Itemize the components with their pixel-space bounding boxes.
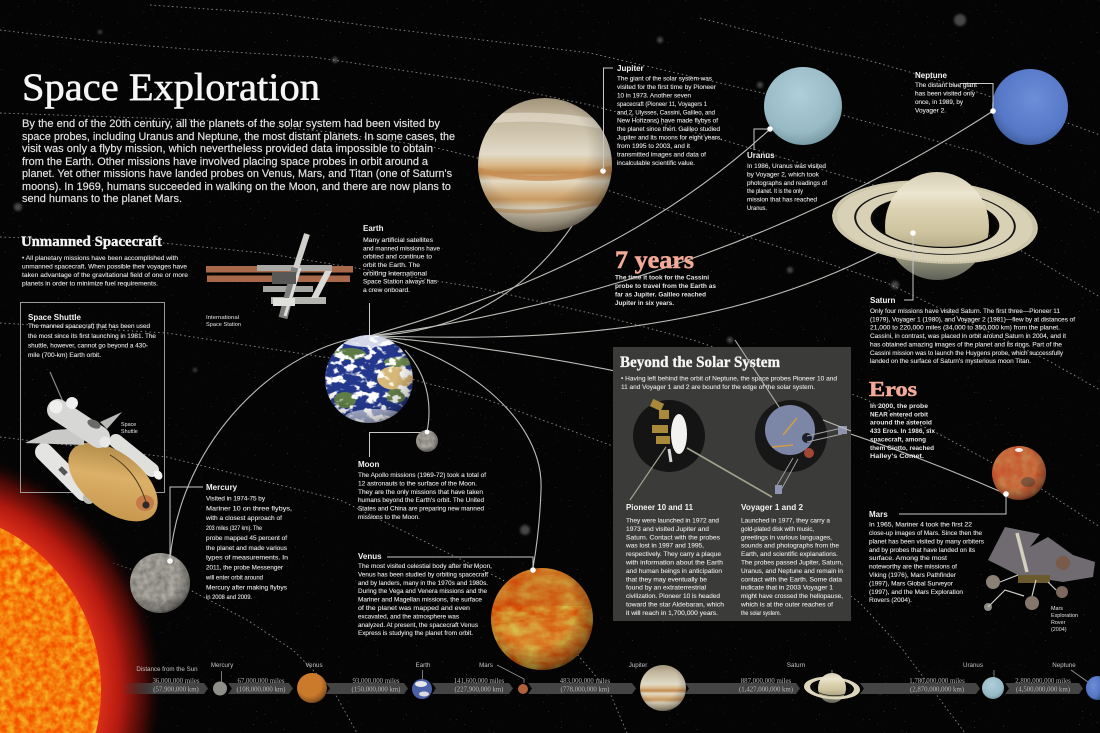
text: mercury: with a closest approach of (205, 515, 282, 522)
column: pioneer 10 and 11: was lost in 1997 and 1995, (625, 543, 704, 550)
text: neptune: has been visited only (915, 90, 976, 98)
text: mars: Mars (869, 510, 888, 519)
column: pioneer 10 and 11: found by an extraterrestrial (626, 585, 707, 592)
planet: neptune (960, 69, 1068, 145)
intro paragraph: moons). In 1969, humans succeeded in walking on the Moon, and there are now plans to (22, 181, 451, 193)
intro (621, 376, 837, 391)
column: pioneer 10 and 11: with information about the Earth (625, 560, 723, 566)
distances: 67,000,000 miles (237, 678, 285, 685)
distances: 141,600,000 miles (454, 678, 505, 685)
column: pioneer 10 and 11: and human beings in anticipation (626, 568, 722, 575)
text: uranus: In 1986, Uranus was visited (747, 163, 826, 170)
text: mars: and by probes that have landed on its (869, 547, 976, 554)
text: mercury: Mercury after making flybys (206, 584, 288, 591)
intro paragraph: planet. Yet other missions have landed probes on Venus, Mars, and Titan (one of Saturn's (22, 168, 452, 180)
description: planets in order to minimize fuel requirements. (22, 280, 158, 288)
text: uranus: Uranus. (747, 205, 767, 212)
scale: neptune (1052, 662, 1100, 700)
description: the most since its first launching in 1981. The (28, 333, 156, 340)
column: voyager 1 and 2: Voyager 1 and 2 (741, 502, 803, 512)
intro paragraph: send humans to the planet Mars. (22, 193, 182, 205)
column: pioneer 10 and 11: 1973 and visited Jupiter and (626, 526, 709, 533)
callout: eros: 433 Eros. In 1986, six (870, 428, 935, 435)
description (22, 255, 188, 288)
text: saturn: Saturn (870, 296, 895, 305)
text: venus: and by landers, many in the 1970s and 1980s. (358, 580, 488, 587)
text: saturn: (1979), Voyager 1 (1980), and Voyager 2 (1981)—flew by at distances of (870, 316, 1075, 323)
text: jupiter: visited for the first time by Pioneer (617, 84, 717, 91)
text: jupiter: 10 in 1973. Another seven (617, 92, 691, 99)
intro paragraph: By the end of the 20th century, all the planets of the solar system had been visited by (22, 118, 440, 130)
column: voyager 1 and 2: which is at the outer reaches of (740, 602, 833, 608)
text: jupiter: spacecraft (Pioneer 11, Voyagers 1 (617, 101, 707, 108)
column: pioneer 10 and 11: civilization. Pioneer 10 is headed (626, 593, 720, 600)
heading: distance from the sun: Distance from the Sun (136, 666, 198, 673)
description (28, 323, 156, 359)
panel: space shuttle (20, 302, 172, 537)
text: moon: 12 astronauts to the surface of the Moon. (358, 480, 477, 487)
text: neptune (915, 71, 977, 114)
callout: eros: spacecraft, among (870, 436, 926, 443)
text: mars: Viking (1976), Mars Pathfinder (869, 572, 957, 579)
text: mercury: will enter orbit around (205, 574, 263, 581)
label: space shuttle: Space (121, 422, 136, 428)
callout: eros: Eros (869, 377, 917, 401)
text: saturn: has obtained amazing images of the planet and its rings. Part of the (870, 341, 1062, 348)
column: pioneer 10 and 11 (625, 502, 724, 617)
planet: uranus (754, 67, 842, 150)
callout: 7 years: The time it took for the Cassini (615, 274, 709, 282)
text: venus: During the Vega and Venera missions and the (358, 588, 487, 595)
text: mercury (205, 483, 292, 601)
planet: mercury with leader (130, 487, 203, 613)
planet: mars (899, 446, 1046, 514)
description: shuttle, however, cannot go beyond a 430- (28, 342, 148, 350)
text: venus: The most visited celestial body after the Moon, (358, 563, 492, 570)
text: jupiter: Jupiter and its moons for eight years, (617, 135, 722, 142)
text: neptune: Voyager 2. (915, 108, 946, 114)
space station (206, 234, 353, 328)
text: venus (358, 552, 533, 637)
text: mercury: the planet and made various (206, 545, 288, 552)
label: space shuttle (121, 422, 138, 435)
column: voyager 1 and 2: indicate that in 2003 Voyager 1 (741, 585, 833, 592)
text: saturn: 21,000 to 220,000 miles (34,000 to 350,000 km) from the planet. (870, 325, 1060, 332)
callout: eros: NEAR entered orbit (870, 411, 929, 418)
text: saturn: landed on the surface of Saturn's mysterious moon Titan. (870, 358, 1031, 365)
text: saturn: Cassini mission was to launch the Huygens probe, which successfully (870, 350, 1064, 357)
text: uranus: the planet. It is the only (747, 188, 804, 195)
sun with red glow (0, 440, 170, 733)
distances: (150,000,000 km) (352, 686, 400, 694)
distances: 483,000,000 miles (560, 678, 611, 685)
distance band segments (121, 683, 1083, 694)
text: jupiter: the planet since then. Galileo studied (617, 126, 720, 133)
text: venus: Venus has been studied by orbiting spacecraft (358, 571, 488, 578)
text: jupiter (604, 64, 722, 170)
planet: moon with leader (370, 430, 438, 457)
scale: earth: Earth (416, 662, 431, 669)
text: uranus: photographs and readings of (747, 180, 827, 187)
callout: 7 years: Jupiter in six years. (615, 300, 674, 307)
text: mercury: 203 miles (327 km). The (206, 525, 262, 532)
label: mars exploration rover: Rover (1051, 620, 1066, 626)
column: voyager 1 and 2: contact with the Earth. Some data (741, 576, 842, 583)
title: Space Exploration (22, 66, 320, 109)
label: mars exploration rover: Mars (1051, 606, 1063, 612)
text: uranus: by Voyager 2, which took (747, 171, 820, 178)
text: mercury: 2011, the probe Messenger (206, 565, 284, 572)
text: jupiter: New Horizons) have made flybys of (617, 118, 718, 125)
callout: 7 years: probe to travel from the Earth as (615, 283, 716, 290)
callout: eros: In 2000, the probe (870, 403, 928, 410)
intro paragraph: from the Earth. Other missions have involved placing space probes in orbit around a (22, 156, 429, 168)
icon: international space station (206, 234, 353, 318)
scale: mercury (211, 662, 234, 696)
distances: (1,427,000,000 km) (739, 686, 793, 694)
text: earth: orbit the Earth. The (363, 262, 420, 269)
icon: mars exploration rover (984, 527, 1095, 611)
heading: Space Shuttle (28, 313, 81, 322)
text: mars: planet has been visited by many orbiters (869, 538, 985, 545)
column: voyager 1 and 2: Earth, and scientific explanations. (741, 551, 838, 558)
text: mars: surface. Among the most (869, 555, 947, 562)
text: moon: humans beyond the Earth's orbit. The United (358, 497, 484, 504)
column: voyager 1 and 2: might have crossed the heliopause, (741, 593, 843, 600)
text: jupiter: The giant of the solar system was (617, 76, 713, 82)
text: mercury: probe mapped 45 percent of (206, 535, 287, 542)
text: jupiter: incalculable scientific value. (617, 160, 695, 167)
text: mercury: Visited in 1974-75 by (206, 496, 266, 502)
text: mars: noteworthy are the missions of (869, 564, 957, 571)
label: international space station: International (206, 315, 239, 321)
scale: venus: Venus (305, 662, 323, 669)
description: unmanned spacecraft. When possible their voyages have (22, 264, 187, 270)
planet: saturn (832, 172, 1038, 300)
text: jupiter: transmitted images and data of (617, 151, 706, 158)
planet: jupiter (478, 98, 612, 232)
icon: space shuttle (25, 372, 172, 537)
label: mars exploration rover: Exploration (1051, 613, 1078, 619)
text: venus: Express is studying the planet from orbit. (358, 630, 473, 637)
distances: 93,000,000 miles (352, 678, 400, 685)
scale: earth (412, 662, 432, 699)
text: uranus: mission that has reached (747, 197, 817, 204)
text: earth: orbited and continue to (363, 254, 432, 261)
scale: mars: Mars (479, 662, 493, 669)
column: voyager 1 and 2: The probes passed Jupiter, Saturn, (741, 560, 843, 566)
column: voyager 1 and 2: Launched in 1977, they carry a (741, 518, 830, 524)
text: venus: Mariner and Magellan missions, the surface (358, 597, 482, 604)
label: mars exploration rover (1051, 606, 1078, 633)
column: voyager 1 and 2: the solar system. (741, 610, 781, 617)
text: jupiter: from 1995 to 2003, and it (617, 143, 690, 150)
distances: 2,800,000,000 miles (1015, 678, 1071, 685)
column: voyager 1 and 2 (740, 502, 843, 617)
distances: (57,900,000 km) (153, 686, 199, 694)
panel background (613, 347, 851, 621)
text: neptune: The distant blue giant (915, 82, 977, 89)
distances: (778,000,000 km) (561, 686, 609, 694)
distance scale (121, 662, 1100, 711)
column: pioneer 10 and 11: that they may eventually be (626, 576, 707, 583)
text: earth: Space Station always has (363, 279, 438, 286)
description: taken advantage of the gravitational field of one or more (22, 272, 188, 279)
text: moon: Moon (358, 460, 379, 469)
scale: uranus: Uranus (963, 662, 983, 669)
column: voyager 1 and 2: Uranus, and Neptune and remain in (741, 568, 843, 575)
column: pioneer 10 and 11: Saturn. Contact with the probes (626, 534, 721, 541)
column: pioneer 10 and 11: Pioneer 10 and 11 (626, 502, 693, 512)
distances: 887,000,000 miles (741, 678, 792, 685)
distances: 36,000,000 miles (152, 678, 200, 685)
text: earth (363, 224, 440, 336)
text: venus: analyzed. At present, the spacecraft Venus (358, 622, 479, 629)
intro paragraph (22, 118, 455, 205)
text: moon: They are the only missions that have taken (358, 489, 483, 496)
text: earth: a crew onboard. (363, 287, 410, 294)
column: pioneer 10 and 11: toward the star Aldebaran, which (626, 602, 724, 608)
text: mercury: in 2008 and 2009. (206, 594, 252, 601)
column: voyager 1 and 2: sounds and photographs from the (741, 543, 839, 550)
distances: (2,870,000,000 km) (910, 686, 964, 694)
scale: jupiter (629, 662, 686, 711)
text: saturn: Only four missions have visited Saturn. The first three—Pioneer 11 (870, 308, 1060, 315)
text: earth: Earth (363, 224, 384, 233)
distances: 1,780,000,000 miles (909, 678, 965, 685)
text: mars: Rovers (2004). (869, 597, 912, 604)
callout: eros: them Giotto, reached (870, 445, 934, 452)
label: international space station: Space Station (206, 322, 241, 328)
scale: mercury: Mercury (211, 662, 234, 669)
text: uranus (747, 151, 827, 212)
heading: Beyond the Solar System (620, 354, 781, 371)
text: mars: (1997), and the Mars Exploration (869, 589, 963, 596)
text: moon: missions to the Moon. (358, 514, 420, 521)
text: venus: of the planet was mapped and even (358, 605, 470, 612)
scale: mars (479, 662, 528, 694)
text: jupiter: and 2, Ulysses, Cassini, Galileo, and (617, 109, 715, 116)
text: mars (869, 510, 985, 604)
column: voyager 1 and 2: greetings in various languages, (741, 534, 832, 541)
column: voyager 1 and 2: gold-plated disk with music, (741, 526, 814, 533)
label: international space station (206, 315, 241, 328)
text: mars: In 1965, Mariner 4 took the first 22 (869, 522, 972, 528)
intro paragraph: space probes, including Uranus and Neptune, the most distant planets. In some cases, the (22, 131, 455, 143)
callout: 7 years: far as Jupiter. Galileo reached (615, 291, 706, 298)
scale: uranus (963, 662, 1004, 699)
text: earth: and manned missions have (363, 245, 440, 252)
text: neptune: once, in 1989, by (915, 99, 964, 106)
text: mars: (1997), Mars Global Surveyor (869, 580, 954, 587)
trajectory lines from Earth (170, 111, 1006, 568)
callout: eros (869, 377, 935, 460)
intro paragraph: visit was only a flyby mission, which nevertheless provided data impossible to obtain (22, 143, 433, 155)
text: mars: close-up images of Mars. Since then the (869, 530, 982, 537)
distances (152, 678, 1071, 694)
distances: (4,500,000,000 km) (1016, 686, 1070, 694)
text: venus: excavated, and the atmosphere was (358, 613, 460, 620)
callout: 7 years: 7 years (615, 247, 694, 274)
distances: (227,900,000 km) (455, 686, 503, 694)
scale: neptune: Neptune (1052, 662, 1076, 669)
label: space shuttle: Shuttle (121, 429, 138, 435)
text: uranus: Uranus (747, 151, 775, 160)
column: pioneer 10 and 11: it will reach in 1,700,000 years. (626, 610, 718, 617)
heading: Unmanned Spacecraft (21, 234, 162, 250)
section: unmanned spacecraft (21, 234, 188, 288)
callout: eros: Halley's Comet. (870, 453, 924, 460)
description: The manned spacecraft that has been used (28, 323, 150, 330)
column: pioneer 10 and 11: respectively. They carry a plaque (626, 551, 721, 558)
distances: (108,000,000 km) (237, 686, 285, 694)
text: moon: The Apollo missions (1969-72) took a total of (358, 472, 486, 479)
text: moon (358, 460, 486, 521)
scale: jupiter: Jupiter (629, 662, 647, 669)
text: moon: States and China are preparing new manned (358, 506, 484, 513)
intro: • Having left behind the orbit of Neptune, the space probes Pioneer 10 and (621, 376, 837, 382)
label: mars exploration rover: (2004) (1051, 627, 1067, 633)
planet: earth (325, 329, 413, 425)
description: • All planetary missions have been accomplished with (22, 255, 178, 262)
intro: 11 and Voyager 1 and 2 are bound for the edge of the solar system. (621, 384, 815, 391)
scale: venus (297, 662, 327, 703)
text: saturn: Cassini, in contrast, was placed in orbit around Saturn in 2004, and it (870, 333, 1066, 340)
text: venus: Venus (358, 552, 382, 561)
callout: 7 years (615, 247, 716, 307)
icon: pioneer probe (630, 399, 772, 500)
icon: voyager probe (735, 340, 851, 494)
text: mercury: Mercury (206, 483, 238, 492)
panel: beyond the solar system (613, 340, 851, 621)
text: mercury: types of measurements. In (206, 555, 288, 562)
column: pioneer 10 and 11: They were launched in 1972 and (626, 518, 719, 524)
description: mile (700-km) Earth orbit. (28, 352, 101, 359)
text: earth: orbiting International (363, 270, 428, 277)
text: earth: Many artificial satellites (363, 237, 434, 244)
box (20, 302, 164, 492)
callout: eros: around the asteroid (870, 420, 932, 427)
scale: saturn: Saturn (787, 662, 806, 669)
planet: venus (490, 566, 594, 670)
text: neptune: Neptune (915, 71, 948, 80)
scale: saturn (787, 662, 858, 703)
text: jupiter: Jupiter (617, 64, 644, 73)
text: saturn (870, 296, 1075, 365)
text: mercury: Mariner 10 on three flybys, (206, 505, 292, 512)
